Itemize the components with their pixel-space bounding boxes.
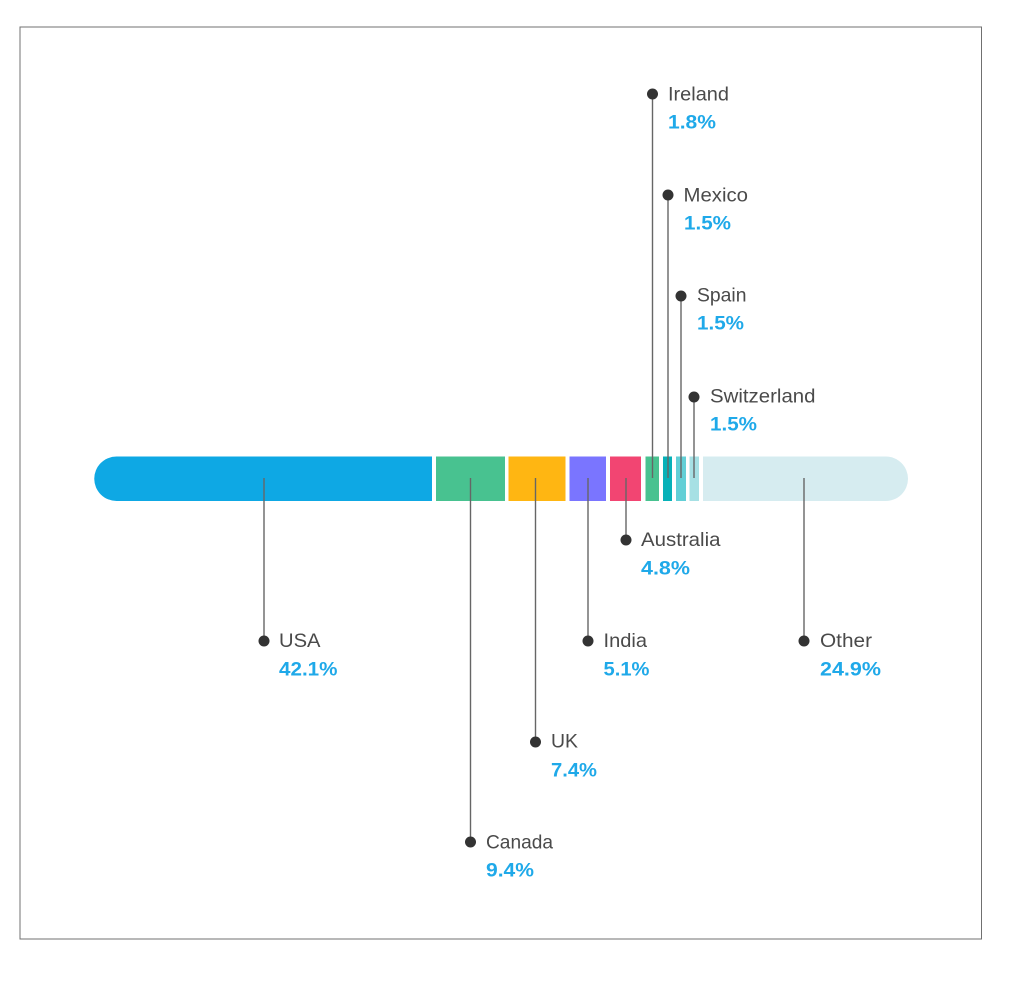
callout: UK: UK [551,730,578,752]
callout: Switzerland [688,386,816,478]
callout: Mexico: Mexico [684,184,748,206]
callout: Ireland: 1.8% [668,112,716,134]
callout: UK [530,478,597,782]
callout: Ireland: Ireland [668,84,729,106]
callout: India: India [604,630,647,652]
callout: Australia: Australia [641,529,721,551]
segment: India [570,456,606,501]
callout: Switzerland: 1.5% [710,414,757,436]
callout: Other [798,478,881,680]
callout: Canada: 9.4% [486,860,534,882]
callout: USA: USA [279,630,320,652]
callout: Mexico: 1.5% [684,214,731,234]
segment: Spain [676,456,686,501]
callout: Mexico [662,184,748,478]
callout: USA: 42.1% [279,660,338,680]
callout: Spain: 1.5% [697,314,744,334]
callout: Australia [620,478,721,580]
callout: Canada [465,478,553,882]
callout: Australia: 4.8% [641,558,690,580]
callout: Other: 24.9% [820,660,881,680]
segment: Ireland [646,456,659,501]
callout: Spain: Spain [697,284,746,306]
callout: Spain [676,284,746,478]
callout: Ireland [647,84,729,478]
callout: India [582,478,650,680]
segment: Australia [610,456,641,501]
callout: Canada: Canada [486,832,553,854]
callout: Switzerland: Switzerland [710,386,816,408]
callout: UK: 7.4% [551,760,597,782]
callout: USA [258,478,338,680]
segment: Mexico [663,456,672,501]
segmented bar chart [94,456,908,501]
segment: UK [508,456,566,501]
segment: Switzerland [690,456,699,501]
callout: Other: Other [820,630,873,652]
callout: India: 5.1% [604,660,650,680]
segment: Other [703,456,908,501]
segment: Canada [436,456,505,501]
segment: USA [94,456,432,501]
